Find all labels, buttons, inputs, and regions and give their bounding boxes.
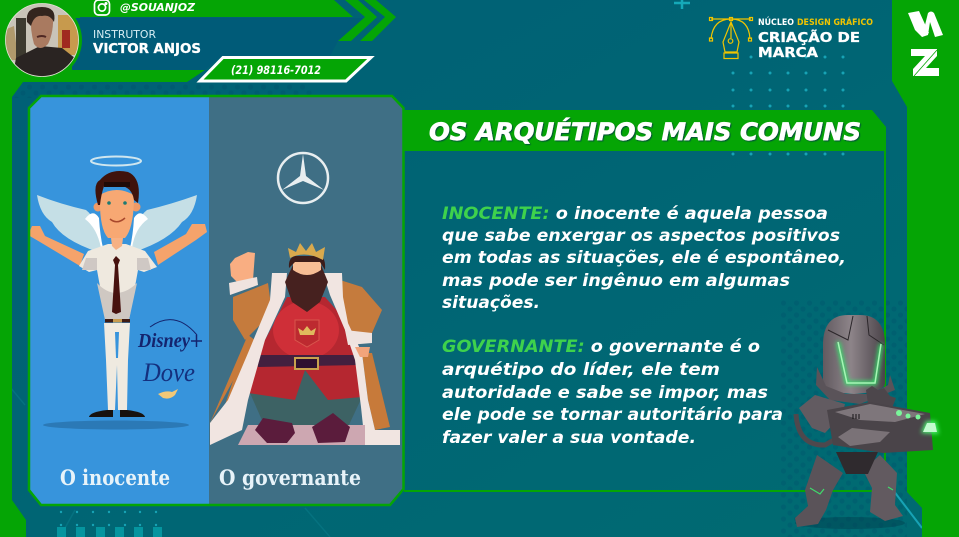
shoes <box>89 410 145 417</box>
robot gun glow <box>921 421 939 434</box>
robot visor glow <box>838 342 881 383</box>
robot arm and strap <box>799 395 845 433</box>
text block: innocent: mas pode ser ingênuo em algumas <box>442 271 790 291</box>
right green bar <box>892 0 959 537</box>
icon: pen nib <box>710 18 752 58</box>
text block: ruler: ele pode se tornar autoritário para <box>442 405 783 425</box>
instructor label: INSTRUTOR <box>93 29 156 41</box>
panel: archetype images <box>28 96 404 505</box>
phone badge: (21) 98116-7012 <box>231 63 321 77</box>
logo: NZ mark <box>908 11 943 76</box>
text block: ruler: GOVERNANTE: o governante é o <box>442 337 760 357</box>
panel: text content <box>404 110 886 491</box>
cape back <box>210 330 250 423</box>
trousers <box>250 370 362 427</box>
head <box>94 202 102 212</box>
text block: innocent: INOCENTE: o inocente é aquela pessoa <box>442 204 828 224</box>
background dots <box>60 56 845 526</box>
tie <box>112 256 121 314</box>
robot gun <box>827 402 933 453</box>
logo: design nucleus: DESIGN GRÁFICO <box>797 16 873 28</box>
logo: Dove: Dove <box>142 358 195 387</box>
label: ruler: O governante <box>219 465 361 490</box>
belt <box>258 355 360 367</box>
text block: ruler: arquétipo do líder, ele tem <box>442 360 720 380</box>
logo: design nucleus: CRIAÇÃO DE <box>758 29 860 46</box>
illustration: innocent angel <box>28 156 207 430</box>
shirt <box>79 244 157 320</box>
label: innocent: O inocente <box>60 465 170 490</box>
text block: innocent: que sabe enxergar os aspectos positivos <box>442 226 840 246</box>
wings <box>37 195 103 252</box>
avatar photo <box>5 3 82 77</box>
halo <box>91 156 141 166</box>
text block: ruler <box>442 337 783 448</box>
robot legs <box>795 455 843 527</box>
chevrons <box>338 0 377 41</box>
emblem <box>295 320 319 347</box>
robot hand <box>866 386 896 408</box>
logo: design nucleus: NÚCLEO <box>758 16 794 28</box>
heading: OS ARQUÉTIPOS MAIS COMUNS <box>429 117 861 146</box>
left green frame <box>0 0 353 537</box>
logo: Disney+ <box>137 320 202 352</box>
mercedes logo <box>278 153 328 203</box>
instructor name: VICTOR ANJOS <box>93 41 201 57</box>
crown <box>288 243 325 260</box>
handle: @SOUANJOZ <box>120 2 195 14</box>
fur trim <box>210 273 287 445</box>
boots <box>255 418 295 443</box>
shadow <box>43 420 189 430</box>
sleeves <box>233 283 272 340</box>
king hand <box>230 252 255 283</box>
phone badge <box>200 58 371 81</box>
legs <box>104 323 130 410</box>
text block: ruler: fazer valer a sua vontade. <box>442 428 696 448</box>
tunic <box>248 297 362 400</box>
icon: instagram <box>94 0 110 15</box>
text block: innocent: situações. <box>442 293 540 313</box>
beard <box>285 265 328 312</box>
robot helmet <box>823 315 885 394</box>
text block: ruler: autoridade e sabe se impor, mas <box>442 383 768 403</box>
text block: innocent: em todas as situações, ele é espontâneo, <box>442 248 846 268</box>
arms <box>28 226 84 266</box>
illustration: ruler king <box>210 243 400 445</box>
heading band <box>404 110 886 150</box>
logo: Disney+: Disney <box>137 330 190 352</box>
logo: design nucleus: MARCA <box>758 45 819 61</box>
belt <box>105 319 130 322</box>
logo: design nucleus <box>710 16 873 61</box>
bottom squares <box>57 527 162 537</box>
robot character <box>795 315 939 529</box>
logo: Dove <box>142 358 195 399</box>
header: instructor band <box>72 0 396 70</box>
text block: innocent <box>442 204 846 313</box>
